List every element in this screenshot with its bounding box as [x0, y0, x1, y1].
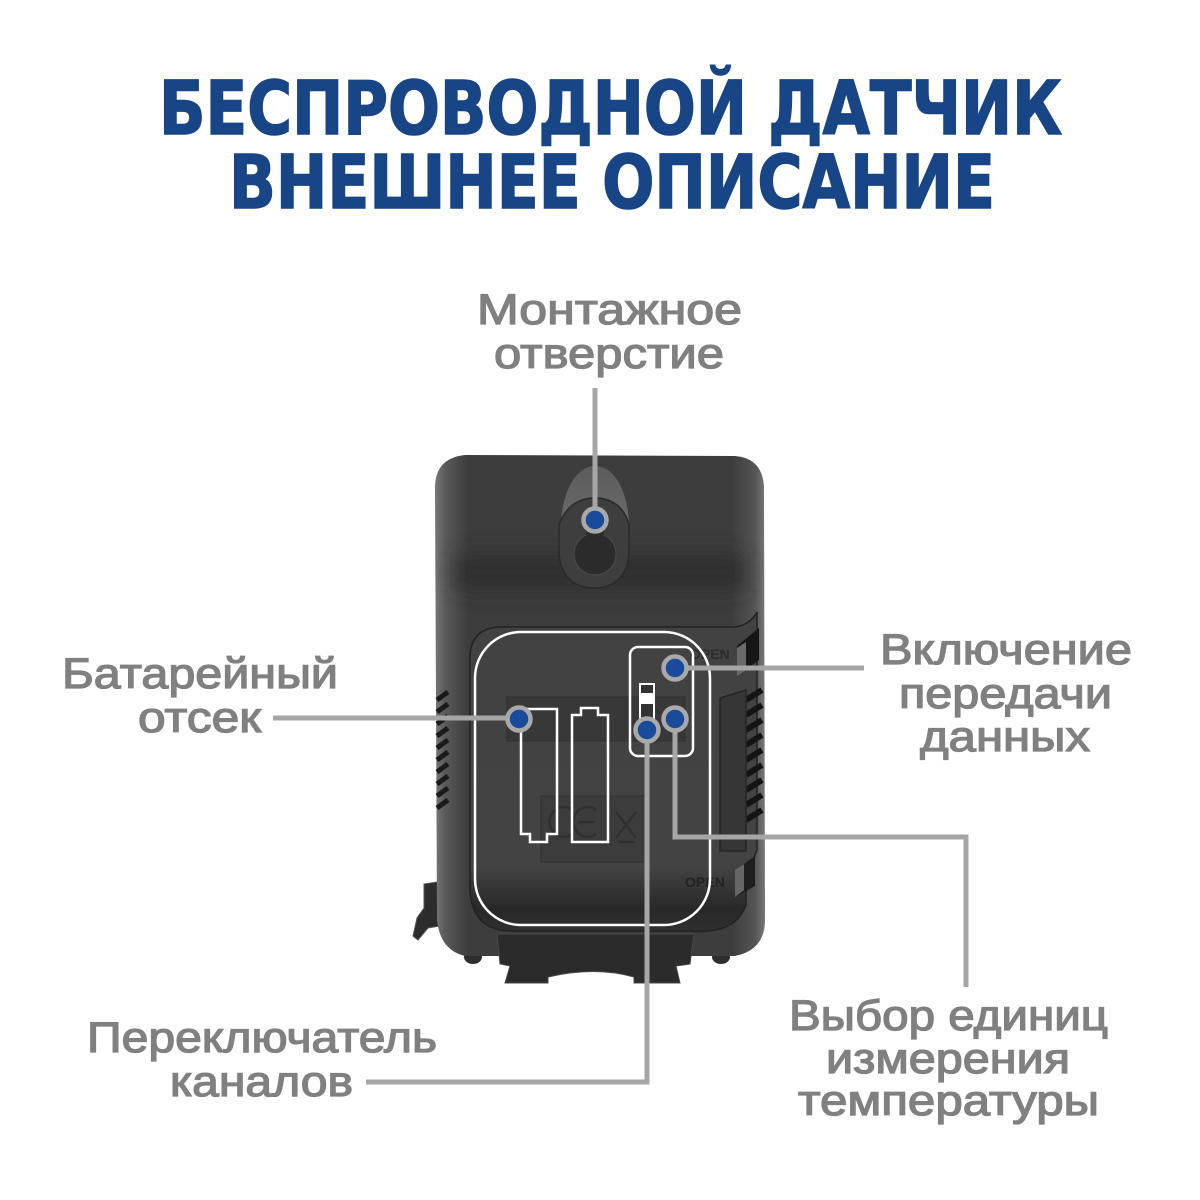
title: ВНЕШНЕЕ ОПИСАНИЕ — [229, 140, 995, 226]
callout: mounting hole: отверстие — [494, 330, 724, 378]
outline: battery 2 — [572, 708, 608, 842]
device: wireless sensor back view — [413, 455, 765, 983]
embossed label panels — [507, 697, 685, 741]
callout: channel switch: Переключатель — [87, 1014, 437, 1062]
bottom stand — [497, 934, 694, 983]
outline: battery 1 — [521, 709, 557, 842]
callout: mounting hole: Монтажное — [477, 286, 742, 334]
callout: temperature units: измерения — [826, 1035, 1070, 1083]
outline: switch block — [630, 647, 693, 756]
callout: data transmission: данных — [920, 713, 1091, 761]
device: wireless sensor back view: OPEN — [690, 646, 730, 662]
callout: data transmission — [664, 626, 1132, 761]
callout: battery compartment: отсек — [138, 694, 262, 742]
side vents left — [437, 692, 448, 808]
soft shading — [455, 555, 745, 590]
cover latch slot — [735, 856, 755, 897]
OPEN marks: OPEN — [685, 874, 725, 890]
callout: channel switch — [87, 718, 658, 1106]
boss face — [559, 498, 629, 588]
sensor body — [435, 455, 765, 956]
callout: channel switch: каналов — [170, 1058, 353, 1106]
icon: side clip — [413, 882, 446, 940]
callout: temperature units: Выбор единиц — [789, 992, 1108, 1040]
callout: battery compartment — [62, 650, 530, 742]
side vents right — [737, 628, 762, 820]
outline: battery compartment — [475, 632, 710, 925]
keyhole — [574, 523, 616, 575]
battery cover — [470, 612, 757, 931]
callout: mounting hole — [477, 286, 742, 532]
callout: battery compartment: Батарейный — [62, 650, 338, 698]
callout: temperature units — [664, 708, 1108, 1125]
mounting boss — [559, 466, 629, 588]
icon: slide switch — [640, 684, 654, 720]
CE and recycle marks — [550, 807, 636, 842]
callout: data transmission: Включение — [880, 626, 1132, 674]
callout: temperature units: температуры — [798, 1077, 1099, 1125]
title — [159, 64, 1062, 226]
callout: data transmission: передачи — [899, 670, 1112, 718]
bottom feet — [464, 950, 482, 964]
